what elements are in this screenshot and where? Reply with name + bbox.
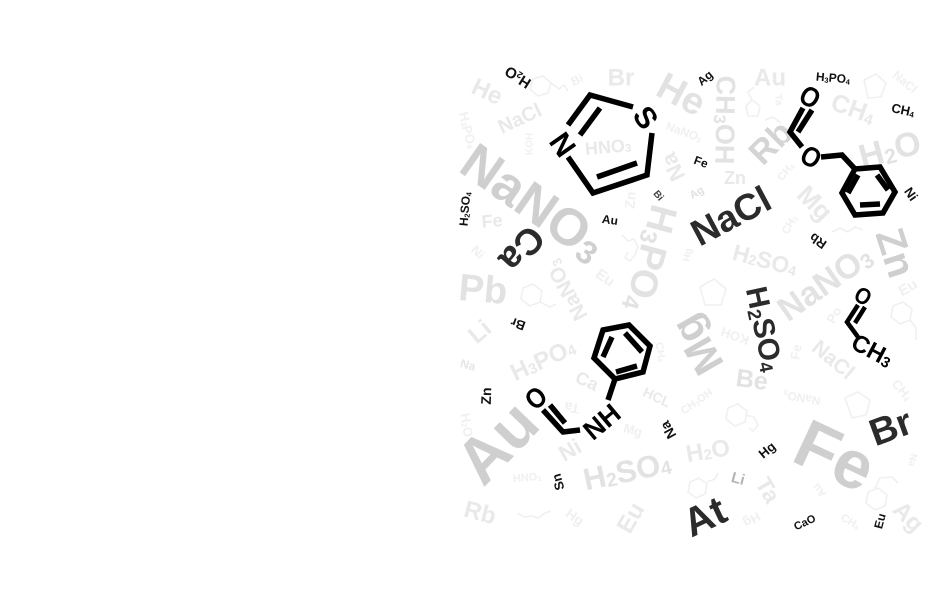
faint small chemical labels: PO: [460, 124, 479, 146]
big grey formulas: Au: [441, 386, 553, 498]
molecule: thiazole ring: S: [626, 100, 664, 136]
large light formulas: 4: [617, 293, 645, 312]
small black labels: O: [501, 62, 521, 83]
faint small chemical labels: 3: [783, 388, 789, 398]
faint small chemical labels: Ni: [468, 242, 488, 262]
faint small chemical labels: Po: [823, 304, 845, 326]
small black labels: Zn: [478, 387, 494, 405]
large light formulas: Pb: [457, 267, 509, 313]
faint small chemical labels: 3: [459, 121, 469, 128]
molecule: benzyl formate: O: [795, 138, 827, 176]
faint small chemical labels: 3: [792, 216, 800, 223]
light medium chemical labels: PO: [529, 337, 572, 376]
light medium chemical labels: 2: [746, 252, 758, 270]
light medium chemical labels: Ag: [887, 496, 929, 538]
molecule: acetaldehyde: [847, 281, 897, 373]
faint small chemical labels: Ag: [688, 184, 706, 202]
light medium chemical labels: 3: [625, 142, 632, 155]
light medium chemical labels: Br: [608, 64, 634, 92]
dark labels: 4: [755, 360, 778, 375]
large light formulas: SO: [612, 447, 663, 490]
large light formulas: OH: [709, 124, 740, 165]
light medium chemical labels: [461, 64, 929, 538]
light medium chemical labels: HNO: [584, 136, 626, 159]
faint small chemical labels: Ta: [772, 94, 784, 107]
faint small chemical labels: Na: [905, 453, 919, 468]
small black labels: Br: [509, 314, 527, 334]
big grey formulas: NaNO: [450, 133, 601, 263]
light medium chemical labels: H: [506, 355, 533, 387]
big grey formulas: Rb: [742, 114, 800, 172]
large light formulas: Be: [734, 364, 770, 396]
molecule: N-phenylformamide: O: [518, 380, 554, 416]
faint small chemical labels: Zn: [621, 191, 639, 209]
big grey formulas: Fe: [783, 405, 887, 507]
dark labels: NaCl: [684, 178, 778, 254]
faint small chemical labels: CH: [679, 398, 699, 417]
light medium chemical labels: NaCl: [495, 99, 545, 139]
faint small chemical labels: H: [458, 412, 474, 424]
faint small chemical labels: 3: [694, 400, 702, 408]
faint small chemical labels: 4: [465, 143, 475, 150]
small black labels: Au: [601, 212, 619, 228]
large light formulas: NaNO: [771, 244, 870, 329]
light medium chemical labels: Mg: [791, 179, 839, 227]
small black labels: H: [516, 71, 534, 92]
large light formulas: CH: [710, 75, 741, 115]
faint small chemical labels: [456, 68, 921, 532]
big grey formulas: 3: [569, 232, 604, 272]
large light formulas: 3: [856, 248, 879, 274]
molecule: N-phenylformamide: NH: [577, 398, 627, 446]
small black labels: PO: [828, 71, 847, 86]
faint small chemical labels: KOH: [524, 133, 536, 155]
light medium chemical labels: NaCl: [807, 336, 859, 384]
faint small chemical labels: Hg: [563, 505, 587, 529]
faint small chemical labels: 2: [460, 422, 469, 429]
small black labels: 3: [824, 75, 829, 84]
light medium chemical labels: NaNO: [545, 262, 593, 324]
molecule: acetaldehyde: 3: [878, 354, 893, 372]
big grey formulas: Li: [729, 469, 747, 489]
light medium chemical labels: Au: [754, 64, 786, 92]
large light formulas: H: [637, 200, 684, 238]
large light formulas: 2: [605, 469, 619, 491]
big grey formulas: Zn: [867, 223, 923, 283]
large light formulas: 3: [634, 227, 663, 246]
faint small chemical labels: Eu: [592, 266, 618, 290]
faint small chemical labels: O: [460, 426, 477, 438]
faint small chemical labels: NaCl: [890, 68, 920, 96]
faint small chemical labels: CH: [889, 376, 912, 400]
faint small chemical labels: CH: [652, 341, 667, 359]
small black labels: 4: [845, 77, 851, 86]
faint small chemical labels: Fe: [787, 343, 805, 361]
small black labels: Sn: [549, 472, 567, 492]
light medium chemical labels: SO: [754, 245, 792, 279]
small black labels: 2: [462, 213, 471, 218]
light medium chemical labels: 4: [565, 342, 580, 360]
large light formulas: H: [855, 133, 888, 176]
large light formulas: 3: [710, 114, 730, 124]
faint small chemical labels: CH: [780, 217, 798, 237]
light medium chemical labels: Ta: [750, 473, 786, 508]
light medium chemical labels: Ca: [572, 367, 603, 395]
small black labels: Ni: [901, 184, 921, 204]
light medium chemical labels: Ni: [554, 434, 586, 466]
molecule: thiazole ring: [542, 95, 664, 193]
light medium chemical labels: H: [730, 239, 753, 268]
faint small chemical labels: Bi: [569, 71, 585, 89]
small black labels: 4: [464, 191, 473, 197]
molecule: acetaldehyde: CH: [847, 329, 890, 369]
small black labels: Eu: [871, 512, 889, 530]
light medium chemical labels: 4: [786, 263, 798, 280]
dark labels: [491, 178, 918, 546]
light medium chemical labels: 2: [703, 447, 714, 464]
faint small chemical labels: Mg: [622, 420, 644, 440]
small black labels: [456, 62, 921, 533]
light medium chemical labels: 4: [861, 110, 876, 129]
light medium chemical labels: 3: [526, 360, 540, 378]
molecule: acetaldehyde: O: [850, 281, 876, 311]
large light formulas: [457, 65, 925, 497]
big grey formulas: Mg: [661, 307, 733, 383]
large light formulas: 2: [882, 144, 899, 169]
light medium chemical labels: 3: [548, 256, 565, 269]
faint small chemical labels: NaNO: [786, 389, 822, 408]
small black labels: CH: [890, 100, 912, 119]
large light formulas: He: [650, 65, 712, 125]
small black labels: H: [815, 70, 825, 84]
faint small chemical labels: 4: [901, 394, 911, 404]
faint small chemical labels: CH: [775, 164, 794, 183]
dark labels: Ca: [491, 218, 553, 281]
light medium chemical labels: Na: [655, 148, 690, 185]
small black labels: Hg: [756, 439, 778, 461]
small black labels: 2: [515, 69, 525, 80]
small black labels: CaO: [792, 513, 818, 533]
dark labels: Br: [864, 401, 918, 455]
molecule: thiazole ring: N: [542, 127, 582, 163]
faint small chemical labels: Na: [459, 356, 478, 374]
small black labels: Na: [657, 418, 679, 442]
small black labels: SO: [458, 195, 473, 214]
small black labels: Ag: [694, 67, 716, 89]
faint small chemical labels: 4: [789, 163, 797, 171]
light medium chemical labels: HCL: [641, 384, 674, 411]
big grey formulas: [441, 114, 923, 507]
small black labels: H: [457, 217, 471, 227]
faint small chemical labels: OH: [695, 387, 715, 406]
molecule: benzyl formate: [790, 78, 895, 215]
light medium chemical labels: Zn: [724, 168, 746, 188]
faint small chemical labels: HNO: [512, 471, 538, 485]
faint small chemical labels: 4: [656, 358, 663, 363]
small black labels: 4: [909, 109, 915, 119]
faint small chemical labels: Ta: [563, 399, 581, 417]
molecule: benzyl formate: O: [794, 78, 826, 116]
molecule: N-phenylformamide: [518, 325, 650, 446]
large light formulas: O: [890, 123, 925, 167]
light medium chemical labels: H: [684, 439, 706, 468]
large light formulas: 4: [659, 457, 674, 480]
dark labels: SO: [746, 315, 787, 364]
light medium chemical labels: Fe: [481, 210, 503, 232]
dark labels: At: [677, 488, 733, 546]
small black labels: Rb: [807, 230, 829, 252]
faint small chemical labels: 3: [537, 475, 542, 483]
faint small chemical labels: CH: [838, 512, 858, 530]
faint small chemical labels: Hg: [741, 509, 763, 531]
faint small chemical labels: 3: [695, 135, 702, 145]
faint small chemical labels: Eu: [895, 276, 921, 300]
light medium chemical labels: He: [467, 73, 507, 111]
large light formulas: PO: [619, 239, 674, 303]
light medium chemical labels: CH: [827, 88, 871, 127]
light medium chemical labels: Li: [463, 315, 497, 349]
faint small chemical labels: Hg: [681, 247, 695, 263]
dark labels: H: [739, 284, 776, 312]
large light formulas: H: [580, 458, 609, 497]
dark labels: 2: [744, 307, 767, 322]
faint small chemical labels: 4: [852, 524, 859, 532]
faint small chemical labels: Au: [811, 481, 829, 499]
faint small chemical labels: NaNO: [664, 119, 700, 144]
faint small chemical labels: H: [456, 110, 473, 123]
faint small chemical labels: KOH: [719, 324, 751, 348]
light medium chemical labels: Rb: [461, 496, 499, 530]
faint line-drawn molecules: [518, 74, 916, 518]
light medium chemical labels: O: [709, 434, 732, 464]
light medium chemical labels: Eu: [612, 498, 650, 538]
small black labels: Bi: [651, 189, 666, 204]
small black labels: Fe: [692, 153, 710, 171]
